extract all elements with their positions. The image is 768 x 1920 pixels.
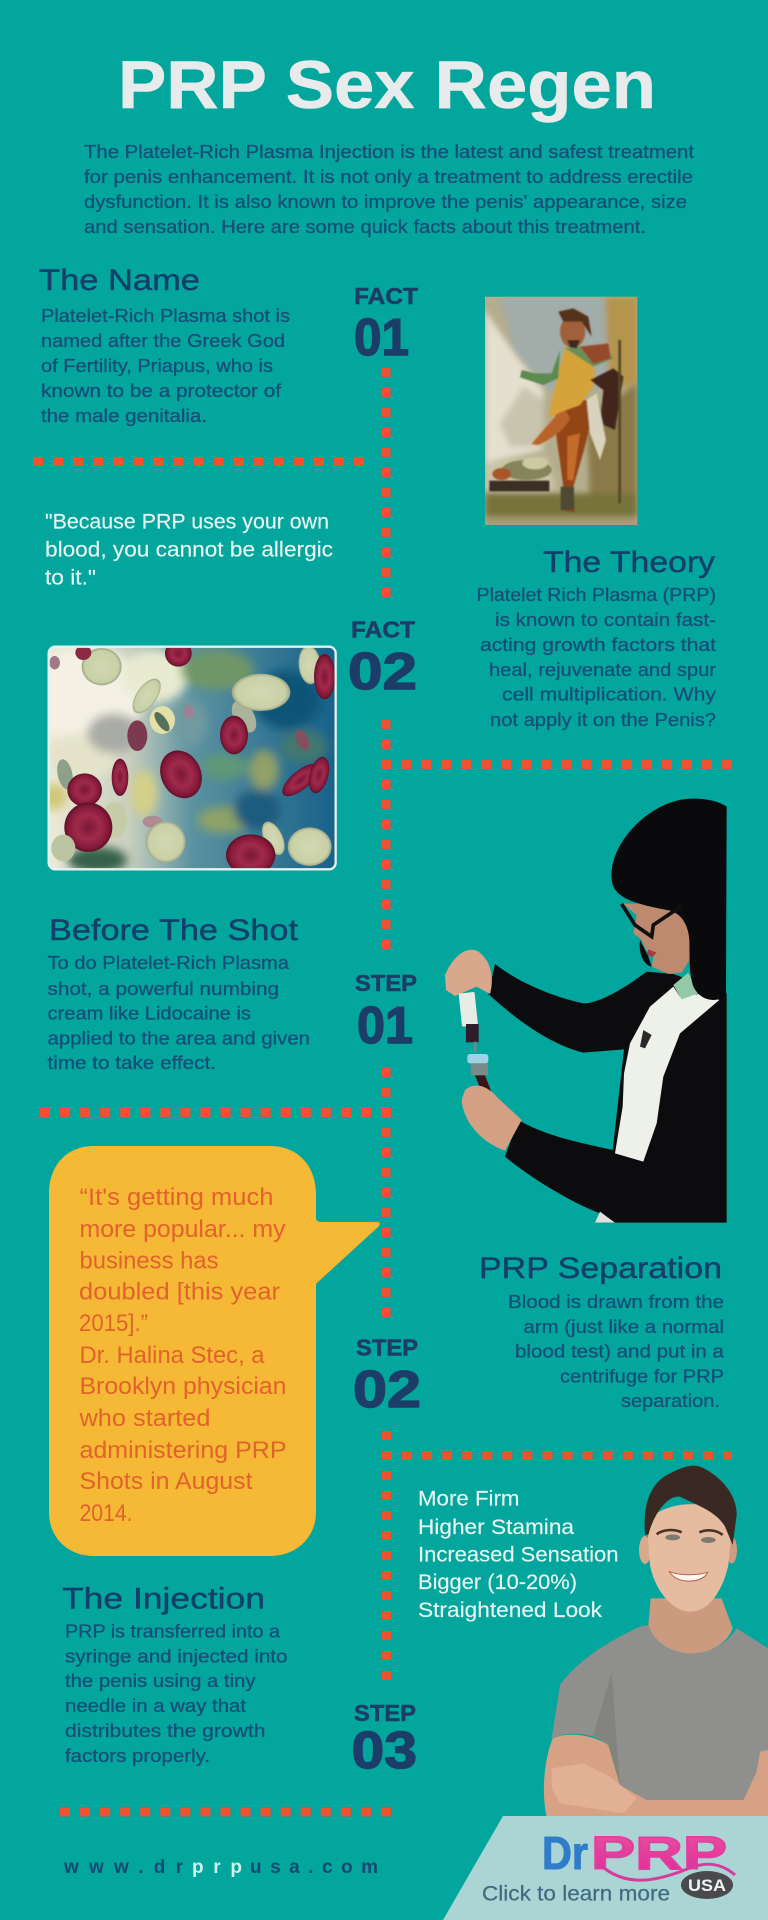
text: the injection body <box>65 1622 288 1766</box>
callout: doctor quote speech bubble: Brooklyn physician <box>80 1373 286 1400</box>
section: the injection <box>62 1582 288 1766</box>
text: PRP separation body: separation. <box>621 1391 720 1411</box>
logo: PRP <box>591 1827 727 1879</box>
photo: woman with syringe <box>445 799 727 1223</box>
callout: doctor quote speech bubble: 2015].” <box>79 1310 148 1337</box>
label: fact 02: FACT <box>351 616 415 642</box>
website url: usa.com <box>250 1857 378 1878</box>
title: PRP Sex Regen <box>118 47 656 123</box>
shirt <box>552 1625 768 1800</box>
label: step 01: STEP <box>355 970 417 996</box>
text: the theory body: acting growth factors that <box>480 635 716 655</box>
text: the injection body: the penis using a tiny <box>65 1671 256 1691</box>
brows and eyes <box>657 1530 723 1535</box>
call to action: Click to learn more <box>482 1882 670 1906</box>
section: PRP separation <box>479 1252 725 1411</box>
text: PRP separation body <box>508 1292 725 1411</box>
text: before the shot body <box>48 953 310 1073</box>
image: fresco of Priapus <box>485 297 637 527</box>
text: the injection body: distributes the growth <box>65 1721 266 1741</box>
callout: doctor quote speech bubble: who started <box>78 1405 210 1432</box>
neck <box>648 1598 733 1654</box>
label: step 03 <box>352 1700 417 1780</box>
label: step 02: 02 <box>353 1361 421 1419</box>
list: benefits: Higher Stamina <box>418 1516 574 1539</box>
label: step 03: STEP <box>354 1700 416 1726</box>
section: the name <box>39 264 290 426</box>
heading: the name: The Name <box>39 264 200 297</box>
text: the name body: named after the Greek God <box>41 331 285 351</box>
label: fact 01: FACT <box>354 283 418 309</box>
text: before the shot body: shot, a powerful numbing <box>48 979 279 999</box>
label: fact 02 <box>348 616 417 701</box>
glasses <box>622 904 682 937</box>
text: the name body: known to be a protector of <box>41 381 282 401</box>
quote: own blood: to it." <box>45 566 96 590</box>
section: before the shot <box>48 914 310 1073</box>
list: benefits: Straightened Look <box>418 1599 603 1622</box>
list: benefits <box>418 1488 618 1622</box>
callout: doctor quote speech bubble: doubled [this year <box>79 1278 280 1306</box>
label: fact 01: 01 <box>354 309 409 367</box>
label: step 03: 03 <box>352 1722 417 1780</box>
text: before the shot body: applied to the area and given <box>48 1028 310 1048</box>
heading: the injection: The Injection <box>62 1582 265 1616</box>
image: blood cells <box>31 640 336 876</box>
intro paragraph: The Platelet-Rich Plasma Injection is the latest and safest treatment <box>84 142 694 162</box>
callout: doctor quote speech bubble: 2014. <box>80 1500 132 1527</box>
callout: doctor quote speech bubble: administering PRP <box>80 1437 286 1464</box>
text: the theory body: is known to contain fast- <box>495 610 716 630</box>
section: the theory <box>476 546 716 730</box>
website url: prp <box>192 1857 242 1878</box>
text: before the shot body: time to take effect. <box>48 1053 216 1073</box>
ears <box>639 1536 650 1564</box>
hair <box>645 1466 737 1545</box>
callout: doctor quote speech bubble: Dr. Halina Stec, a <box>80 1342 265 1369</box>
text: the injection body: needle in a way that <box>65 1696 246 1716</box>
intro paragraph <box>84 142 694 237</box>
sweater <box>488 964 727 1223</box>
face <box>647 1504 733 1612</box>
label: step 02 <box>353 1334 421 1419</box>
website url: www.dr <box>63 1857 184 1878</box>
text: PRP separation body: arm (just like a normal <box>524 1317 724 1337</box>
arms <box>544 1735 768 1817</box>
text: PRP separation body: Blood is drawn from the <box>508 1292 724 1312</box>
text: the name body: Platelet-Rich Plasma shot is <box>41 306 290 326</box>
text: the injection body: syringe and injected into <box>65 1646 288 1666</box>
vial <box>467 1054 488 1063</box>
face <box>623 903 692 974</box>
callout: doctor quote speech bubble: business has <box>80 1248 218 1274</box>
text: the injection body: factors properly. <box>65 1746 210 1766</box>
photo: smiling man <box>544 1466 768 1817</box>
label: fact 01 <box>354 283 418 367</box>
hair <box>611 799 727 1000</box>
heading: before the shot: Before The Shot <box>49 914 298 947</box>
logo: USA <box>688 1876 726 1895</box>
heading: PRP separation: PRP Separation <box>479 1252 722 1285</box>
callout: doctor quote speech bubble: more popular... my <box>80 1216 286 1243</box>
text: the name body: of Fertility, Priapus, who is <box>41 356 273 376</box>
website url <box>63 1857 378 1878</box>
top hand <box>445 950 492 996</box>
quote: own blood: "Because PRP uses your own <box>45 510 329 534</box>
callout: doctor quote speech bubble: Shots in August <box>80 1468 253 1495</box>
lower hand <box>462 1085 522 1151</box>
shirt <box>615 987 719 1162</box>
callout: doctor quote speech bubble <box>49 1146 380 1556</box>
text: before the shot body: cream like Lidocaine is <box>48 1004 251 1024</box>
text: the theory body: heal, rejuvenate and spur <box>489 660 716 680</box>
text: the name body <box>41 306 290 426</box>
intro paragraph: for penis enhancement. It is not only a treatment to address erectile <box>84 167 693 187</box>
logo: Dr <box>542 1827 588 1879</box>
syringe <box>459 992 478 1027</box>
text: the theory body <box>476 585 716 730</box>
text: PRP separation body: blood test) and put in a <box>515 1342 725 1362</box>
text: the injection body: PRP is transferred into a <box>65 1622 281 1642</box>
text: before the shot body: To do Platelet-Rich Plasma <box>48 953 290 973</box>
logo <box>542 1827 735 1899</box>
text: the name body: the male genitalia. <box>41 406 207 426</box>
figure <box>520 308 623 513</box>
heading: the theory: The Theory <box>543 546 715 579</box>
label: fact 02: 02 <box>348 643 417 701</box>
list: benefits: More Firm <box>418 1488 520 1510</box>
quote: own blood <box>45 510 333 590</box>
quote: own blood: blood, you cannot be allergic <box>45 538 333 562</box>
label: step 02: STEP <box>356 1334 418 1360</box>
text: the theory body: cell multiplication. Why <box>502 684 716 704</box>
intro paragraph: dysfunction. It is also known to improve the penis' appearance, size <box>84 192 687 212</box>
callout: doctor quote speech bubble: “It's getting much <box>80 1184 274 1211</box>
fruit basket <box>489 457 552 491</box>
smile <box>669 1572 708 1581</box>
text: the theory body: not apply it on the Penis? <box>490 710 716 730</box>
list: benefits: Increased Sensation <box>418 1544 618 1566</box>
text: the theory body: Platelet Rich Plasma (PRP) <box>476 585 716 605</box>
list: benefits: Bigger (10-20%) <box>418 1571 577 1594</box>
intro paragraph: and sensation. Here are some quick facts about this treatment. <box>84 217 646 237</box>
panel: logo call to action <box>443 1816 768 1920</box>
label: step 01 <box>355 970 417 1055</box>
text: PRP separation body: centrifuge for PRP <box>560 1366 724 1386</box>
label: step 01: 01 <box>357 997 413 1055</box>
